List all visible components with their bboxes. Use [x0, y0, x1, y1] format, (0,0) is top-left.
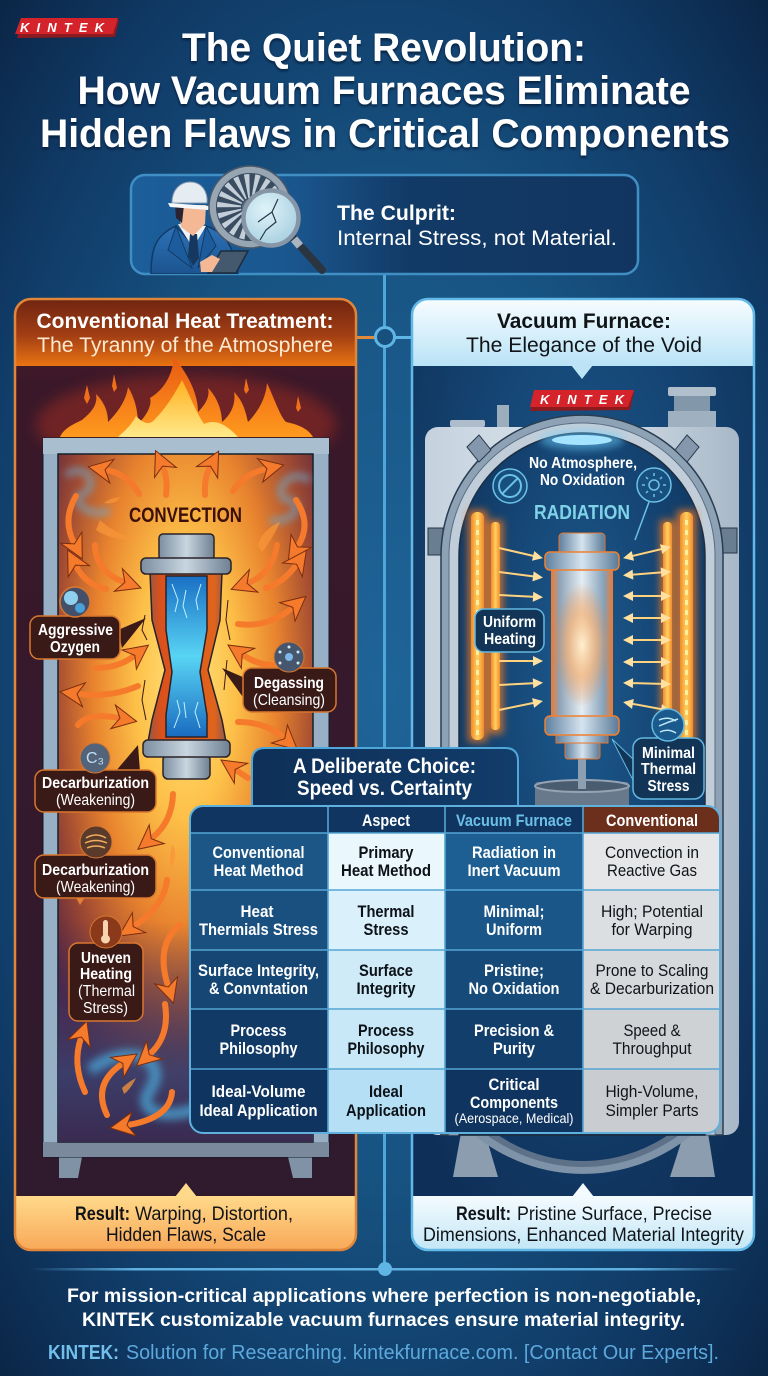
- table header row: Aspect: [362, 812, 410, 830]
- logo: KINTEK top left: KINTEK: [20, 20, 106, 35]
- panel: conventional heat treatment: [14, 298, 357, 1251]
- table column: vacuum furnace: Minimal;: [484, 903, 544, 921]
- right result: Pristine Surface, Precise: [517, 1204, 712, 1225]
- table column: conventional: High; Potential: [601, 903, 703, 921]
- icon: no oxidation: [493, 469, 527, 503]
- label: uneven heating: [69, 916, 143, 1021]
- right result: [423, 1183, 744, 1246]
- title: [40, 26, 730, 156]
- label: uniform heating: Uniform: [483, 614, 536, 631]
- table column: side labels: Conventional: [212, 844, 304, 862]
- radiation heading: RADIATION: [534, 502, 630, 524]
- table column: side labels: Thermials Stress: [199, 921, 318, 939]
- closing statement: For mission-critical applications where perfection is non-negotiable,: [67, 1286, 701, 1307]
- heat wisps: [75, 497, 280, 1094]
- table column: conventional: Speed &: [624, 1022, 680, 1040]
- culprit text: Internal Stress, not Material.: [337, 227, 617, 250]
- table column: side labels: Process: [230, 1022, 286, 1040]
- label: uneven heating: (Thermal: [78, 983, 135, 1000]
- left panel heading: Conventional Heat Treatment:: [36, 310, 334, 333]
- table header row: Conventional: [606, 812, 698, 830]
- table column: aspect: Heat Method: [341, 862, 431, 880]
- label: decarburization upper: Decarburization: [42, 775, 149, 792]
- table column: aspect: Surface: [359, 962, 413, 980]
- table column: aspect: Stress: [364, 921, 408, 939]
- panel: vacuum furnace: [411, 298, 755, 1251]
- heating elements: [468, 510, 696, 747]
- label: aggressive oxygen: Aggressive: [38, 622, 113, 639]
- table column: vacuum furnace: Pristine;: [484, 962, 544, 980]
- table column: conventional: Reactive Gas: [607, 862, 697, 880]
- table column: vacuum furnace: (Aerospace, Medical): [454, 1110, 574, 1126]
- label: degassing: Degassing: [254, 675, 324, 692]
- table column: aspect: Application: [346, 1102, 426, 1120]
- label: aggressive oxygen: [30, 587, 146, 659]
- table header row: Vacuum Furnace: [456, 812, 572, 830]
- label: uniform heating: Heating: [484, 631, 536, 648]
- table column: side labels: [198, 844, 319, 1120]
- table column: vacuum furnace: Critical: [488, 1076, 540, 1094]
- table column: aspect: Philosophy: [348, 1040, 425, 1058]
- furnace body: [425, 387, 739, 1177]
- furnace frame: [43, 438, 329, 1178]
- closing statement: [67, 1286, 701, 1331]
- logo: KINTEK top left: [15, 18, 119, 38]
- right panel heading: The Elegance of the Void: [466, 334, 702, 357]
- label: uneven heating: Uneven: [81, 950, 131, 967]
- component: stressed cylinder: [141, 534, 231, 779]
- title: The Quiet Revolution:: [182, 26, 586, 70]
- comparison heading tab: [252, 748, 518, 806]
- icon: flames: [60, 357, 313, 437]
- table column: side labels: Ideal Application: [200, 1102, 318, 1120]
- table column: conventional: Throughput: [612, 1040, 692, 1058]
- table column: vacuum furnace: Uniform: [486, 921, 542, 939]
- culprit text: [337, 202, 617, 250]
- table column: conventional: Prone to Scaling: [596, 962, 708, 980]
- left result: [75, 1183, 293, 1246]
- illustration: engineer: [151, 182, 248, 274]
- closing statement: KINTEK customizable vacuum furnaces ensure material integrity.: [82, 1310, 685, 1331]
- title: Hidden Flaws in Critical Components: [40, 112, 730, 156]
- table column: vacuum furnace: Components: [470, 1094, 558, 1112]
- label: decarburization upper: C₃: [86, 750, 104, 767]
- footer divider: [30, 1262, 740, 1276]
- arrows: convection currents: [68, 467, 305, 1125]
- smoke swirls: [66, 471, 310, 1114]
- title: How Vacuum Furnaces Eliminate: [78, 69, 690, 113]
- right result: Dimensions, Enhanced Material Integrity: [423, 1225, 744, 1246]
- comparison heading tab: A Deliberate Choice:: [293, 755, 476, 778]
- comparison heading tab: Speed vs. Certainty: [297, 777, 472, 800]
- table column: aspect: [341, 844, 431, 1120]
- contact line: KINTEK:: [48, 1342, 119, 1364]
- label: decarburization upper: [35, 743, 156, 812]
- label: uneven heating: Stress): [83, 1000, 128, 1017]
- label: degassing: (Cleansing): [253, 692, 325, 709]
- text: no atmosphere, no oxidation: No Atmosphere,: [529, 455, 637, 472]
- text: no atmosphere, no oxidation: No Oxidation: [540, 472, 625, 489]
- label: decarburization upper: (Weakening): [56, 792, 135, 809]
- label: aggressive oxygen: Ozygen: [50, 639, 100, 656]
- left result: Warping, Distortion,: [135, 1204, 293, 1225]
- table column: conventional: High-Volume,: [606, 1083, 698, 1101]
- table column: conventional: for Warping: [612, 921, 692, 939]
- table column: aspect: Thermal: [358, 903, 414, 921]
- table column: vacuum furnace: No Oxidation: [468, 980, 560, 998]
- table column: aspect: Ideal: [369, 1083, 403, 1101]
- table column: aspect: Primary: [358, 844, 414, 862]
- arrows: radiation: [499, 548, 666, 710]
- label: uneven heating: Heating: [80, 966, 132, 983]
- table column: conventional: & Decarburization: [590, 980, 714, 998]
- text: no atmosphere, no oxidation: [529, 455, 637, 489]
- table column: side labels: Ideal-Volume: [212, 1083, 306, 1101]
- left result: Result:: [75, 1204, 130, 1225]
- table column: side labels: & Convntation: [209, 980, 308, 998]
- right panel heading: Vacuum Furnace:: [497, 310, 671, 333]
- label: uniform heating: [475, 609, 544, 652]
- left result: Hidden Flaws, Scale: [106, 1225, 266, 1246]
- central connector line: [357, 274, 411, 1270]
- contact line: Solution for Researching. kintekfurnace.com. [Contact Our Experts].: [126, 1342, 719, 1364]
- convection heading: CONVECTION: [129, 504, 242, 527]
- label: minimal thermal stress: Thermal: [641, 761, 696, 778]
- label: decarburization lower: [35, 826, 156, 898]
- table column: side labels: Philosophy: [220, 1040, 298, 1058]
- table column: side labels: Heat Method: [214, 862, 304, 880]
- icon: sun with leader line: [635, 468, 671, 540]
- culprit text: The Culprit:: [337, 202, 456, 225]
- table column: side labels: Surface Integrity,: [198, 962, 319, 980]
- table column: vacuum furnace: Purity: [493, 1040, 536, 1058]
- logo: KINTEK on furnace: KINTEK: [540, 392, 626, 407]
- label: minimal thermal stress: Minimal: [642, 745, 695, 762]
- label: decarburization lower: Decarburization: [42, 862, 149, 879]
- table column: vacuum furnace: Inert Vacuum: [468, 862, 560, 880]
- table column: vacuum furnace: Radiation in: [472, 844, 556, 862]
- table column: vacuum furnace: Precision &: [474, 1022, 554, 1040]
- panel: the culprit: [131, 166, 638, 274]
- right panel heading: [466, 310, 702, 379]
- illustration: turbine under magnifier: [209, 166, 322, 270]
- left panel heading: [36, 310, 334, 357]
- comparison table: [190, 806, 720, 1133]
- right result: Result:: [456, 1204, 511, 1225]
- table column: aspect: Process: [358, 1022, 414, 1040]
- logo: KINTEK on furnace: [530, 390, 634, 411]
- left panel heading: The Tyranny of the Atmosphere: [37, 334, 333, 357]
- table column: conventional: Simpler Parts: [606, 1102, 698, 1120]
- component: uniform cylinder: [535, 533, 629, 812]
- table column: conventional: Convection in: [605, 844, 699, 862]
- table column: side labels: Heat: [240, 903, 274, 921]
- table column: conventional: [590, 844, 714, 1120]
- table column: aspect: Integrity: [356, 980, 416, 998]
- table column: vacuum furnace: [454, 844, 574, 1126]
- label: decarburization lower: (Weakening): [56, 879, 135, 896]
- label: minimal thermal stress: Stress: [648, 778, 690, 795]
- label: minimal thermal stress: [612, 709, 704, 799]
- table header row: [362, 812, 698, 830]
- label: degassing: [222, 642, 336, 712]
